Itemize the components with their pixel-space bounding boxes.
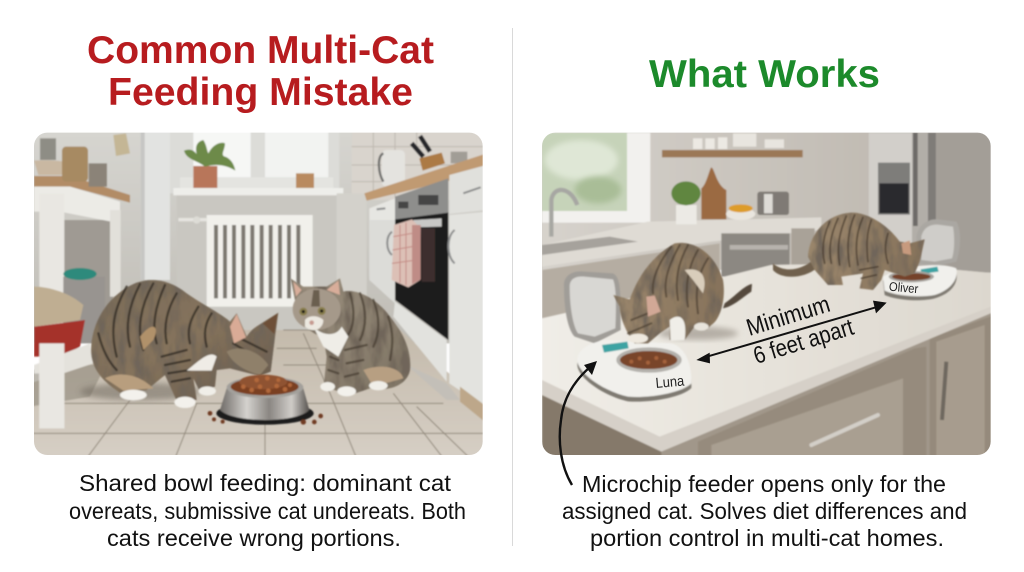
cat: Oliver eating at feeder	[773, 213, 925, 290]
caption: microchip feeder: Microchip feeder opens only for the	[582, 471, 946, 497]
center divider	[512, 28, 513, 546]
title: common mistake: Feeding Mistake	[108, 71, 413, 114]
feeder: Luna	[564, 271, 691, 402]
fur stripes	[328, 293, 392, 377]
plant, cutting board, oranges, toaster	[671, 167, 789, 224]
feeder name labels	[655, 280, 919, 392]
distance label: 6 feet apart	[750, 314, 857, 370]
caption: shared bowl: overeats, submissive cat undereats. Both	[69, 498, 466, 524]
food bowl with kibble	[208, 375, 323, 425]
window	[169, 130, 343, 195]
caption: microchip feeder	[562, 471, 967, 551]
title: common mistake: Common Multi-Cat	[87, 29, 434, 72]
caption: microchip feeder: assigned cat. Solves diet differences and	[562, 498, 967, 524]
cat: submissive tabby watching	[291, 278, 410, 396]
distance label	[746, 300, 855, 363]
panel: separate microchip feeders kitchen photo	[538, 130, 995, 460]
cat: Luna eating at feeder	[613, 243, 752, 343]
fur stripes	[823, 215, 888, 278]
title: what works: What Works	[649, 53, 880, 96]
pink towel	[392, 219, 421, 287]
window with greenery	[542, 133, 650, 223]
fridge	[869, 133, 993, 273]
feeder: Oliver	[883, 219, 960, 300]
left table	[34, 133, 130, 428]
back wall	[538, 130, 995, 270]
floor	[30, 330, 487, 460]
curved arrow to feeder	[560, 361, 597, 485]
caption: shared bowl	[69, 470, 466, 551]
caption: shared bowl: cats receive wrong portions.	[107, 525, 401, 551]
caption: microchip feeder: portion control in multi-cat homes.	[590, 525, 944, 551]
distance label: Minimum	[743, 291, 833, 342]
island cabinets	[542, 307, 995, 460]
tiled wall	[353, 184, 404, 200]
distance arrow between feeders	[696, 301, 887, 363]
right counter and cabinets	[364, 153, 487, 423]
fur stripes	[98, 283, 267, 382]
caption: shared bowl: Shared bowl feeding: dominant cat	[79, 470, 451, 496]
fridge	[144, 132, 170, 280]
back counter with sink	[542, 190, 821, 320]
fur stripes	[628, 245, 708, 333]
feeder name labels: Luna	[655, 373, 686, 392]
cat: dominant tabby eating	[80, 280, 278, 408]
shelf with dishes	[662, 133, 803, 157]
back wall	[30, 130, 487, 343]
feeder name labels: Oliver	[888, 280, 919, 296]
kettle and knife block	[379, 136, 467, 187]
island countertop	[542, 306, 991, 452]
title: common mistake	[87, 29, 434, 114]
panel: shared bowl kitchen photo	[30, 130, 487, 460]
radiator	[178, 215, 313, 307]
